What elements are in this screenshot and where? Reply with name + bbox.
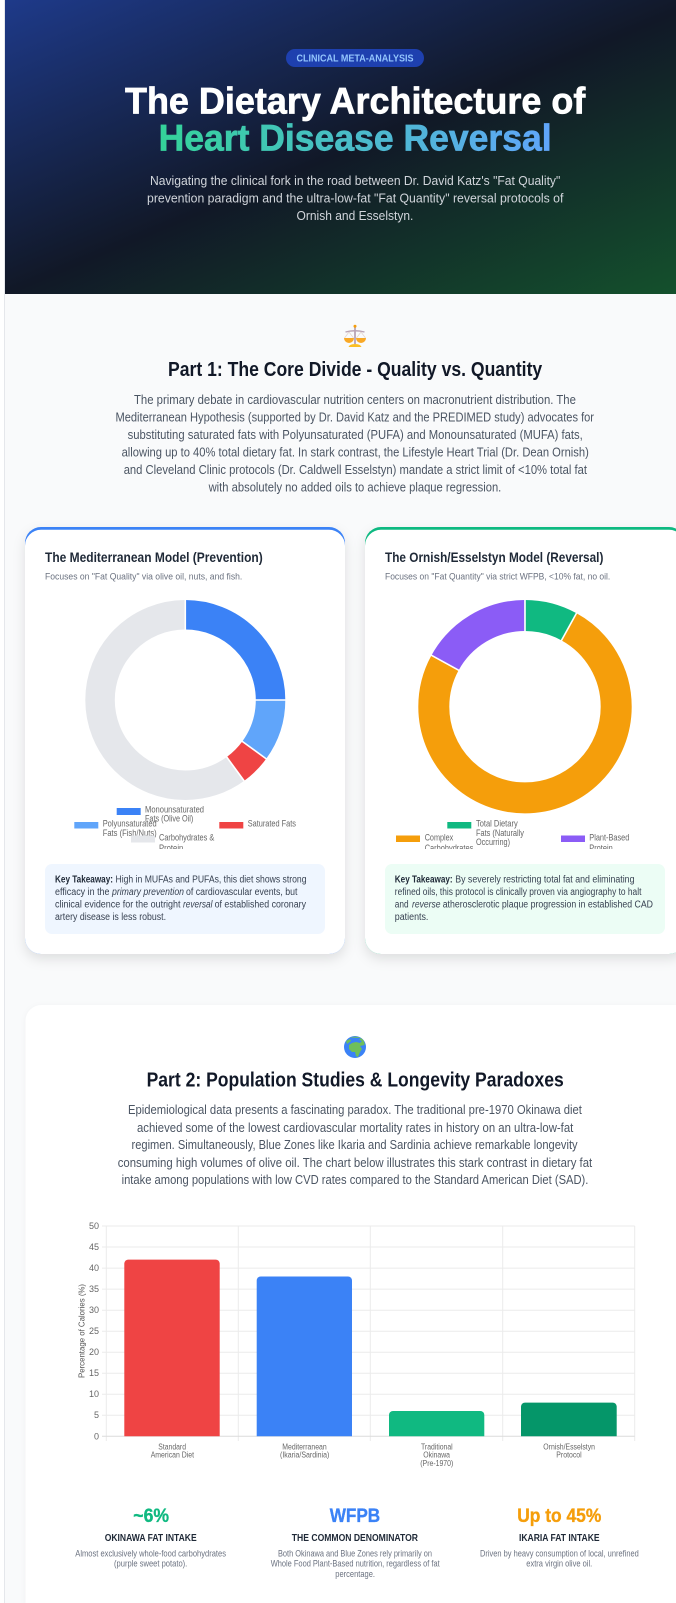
title: The Dietary Architecture of — [125, 79, 586, 121]
y-axis labels: 15 — [89, 1368, 99, 1378]
text block: part 1 introduction: and Cleveland Clinic protocols (Dr. Caldwell Esselstyn) mandate a strict limit of <10% total fat — [124, 463, 587, 477]
stat: ikaria fat intake: extra virgin olive oil. — [526, 1559, 592, 1569]
text block: part 2 introduction: consuming high volumes of olive oil. The chart below illustrates this stark contrast in dietary fat — [118, 1156, 593, 1170]
legend: ornish/esselstyn: Occurring) — [476, 837, 510, 848]
panel: ornish/esselstyn model — [365, 527, 676, 954]
text block: part 1 introduction: with absolutely no added oils to achieve plaque regression. — [208, 480, 501, 494]
text block: part 2 introduction: achieved some of the lowest cardiovascular mortality rates in history on an ultra-low-fat — [137, 1121, 574, 1135]
callout: mediterranean key takeaway: clinical evidence for the outright — [55, 900, 181, 911]
y-axis labels: 35 — [89, 1284, 99, 1294]
stat: ikaria fat intake: Up to 45% — [517, 1505, 601, 1527]
x-axis labels: Ornish/Esselstyn — [543, 1442, 595, 1451]
y-axis labels: 20 — [89, 1347, 99, 1357]
header banner — [5, 0, 676, 294]
stat: common denominator: Both Okinawa and Blue Zones rely primarily on — [278, 1549, 432, 1559]
legend: ornish/esselstyn: Plant-Based — [589, 833, 629, 844]
stat: ikaria fat intake: IKARIA FAT INTAKE — [519, 1533, 600, 1544]
subtitle: Ornish and Esselstyn. — [296, 208, 413, 223]
callout: ornish/esselstyn key takeaway: and — [395, 900, 409, 911]
title: Heart Disease Reversal — [159, 117, 552, 159]
title — [125, 79, 586, 159]
text block: part 1 introduction: The primary debate in cardiovascular nutrition centers on macronutrient distribution. The — [134, 393, 576, 407]
y-axis labels: 30 — [89, 1305, 99, 1315]
x-axis labels: Protocol — [556, 1450, 582, 1459]
legend: mediterranean: Carbohydrates & — [159, 833, 215, 844]
callout: ornish/esselstyn key takeaway: Key Takeaway: — [395, 875, 453, 886]
bar chart: dietary fat intake — [76, 1221, 635, 1468]
subtitle — [147, 173, 564, 223]
legend: ornish/esselstyn — [396, 820, 629, 849]
x-axis labels: Mediterranean — [282, 1442, 327, 1451]
text block: part 1 introduction: Mediterranean Hypothesis (supported by Dr. David Katz and the PREDIMED study) advocates for — [116, 410, 594, 424]
legend: mediterranean: Fats (Fish/Nuts) — [103, 828, 157, 839]
legend: ornish/esselstyn: Complex — [425, 833, 453, 844]
icon: globe — [344, 1036, 366, 1058]
legend: mediterranean: Protein — [159, 843, 183, 854]
bar: standard american diet — [124, 1260, 220, 1436]
legend: ornish/esselstyn: Protein — [589, 843, 613, 854]
stat: ikaria fat intake — [480, 1505, 639, 1569]
x-axis labels: American Diet — [151, 1450, 195, 1459]
badge: clinical meta-analysis: CLINICAL META-ANALYSIS — [296, 53, 414, 64]
donut chart: ornish/esselstyn macronutrients — [431, 599, 616, 798]
callout: mediterranean key takeaway: Key Takeaway: — [55, 875, 113, 886]
card subheading: ornish/esselstyn: Focuses on "Fat Quantity" via strict WFPB, <10% fat, no oil. — [385, 572, 610, 583]
callout: mediterranean key takeaway: primary prevention — [111, 887, 184, 898]
x-axis labels: Standard — [158, 1442, 186, 1451]
panel: mediterranean model — [25, 527, 345, 954]
legend: ornish/esselstyn: Fats (Naturally — [476, 828, 524, 839]
bar: ornish/esselstyn — [521, 1403, 617, 1436]
callout: mediterranean key takeaway: of cardiovascular events, but — [186, 887, 298, 898]
bar: mediterranean — [257, 1276, 352, 1436]
y-axis labels: 50 — [89, 1221, 99, 1231]
y-axis labels: 45 — [89, 1242, 99, 1252]
stat: okinawa fat intake: Almost exclusively whole-food carbohydrates — [75, 1549, 227, 1559]
y-axis title: Percentage of Calories (%) — [76, 1284, 86, 1378]
card subheading: mediterranean: Focuses on "Fat Quality" via olive oil, nuts, and fish. — [45, 572, 242, 583]
y-axis labels: 10 — [89, 1389, 99, 1399]
callout: mediterranean key takeaway — [45, 864, 325, 934]
y-axis labels: 40 — [89, 1263, 99, 1273]
card heading: mediterranean: The Mediterranean Model (Prevention) — [45, 550, 263, 565]
bar: traditional okinawa — [389, 1411, 484, 1436]
text block: part 2 introduction — [118, 1103, 593, 1187]
callout: ornish/esselstyn key takeaway: reverse — [412, 900, 441, 911]
stat: okinawa fat intake: (purple sweet potato). — [114, 1559, 187, 1569]
legend: ornish/esselstyn: Carbohydrates — [425, 843, 473, 854]
callout: ornish/esselstyn key takeaway: By severely restricting total fat and eliminating — [455, 875, 634, 886]
stat: common denominator: WFPB — [330, 1505, 380, 1527]
stat: common denominator: THE COMMON DENOMINATOR — [292, 1533, 418, 1544]
stat: common denominator: Whole Food Plant-Based nutrition, regardless of fat — [271, 1559, 440, 1569]
panel: population studies — [26, 1005, 676, 1603]
heading: part 2: Part 2: Population Studies & Longevity Paradoxes — [147, 1070, 564, 1092]
y-axis labels: 25 — [89, 1326, 99, 1336]
callout: ornish/esselstyn key takeaway — [385, 864, 665, 934]
subtitle: prevention paradigm and the ultra-low-fat "Fat Quantity" reversal protocols of — [147, 190, 564, 205]
x-axis labels: Traditional — [421, 1442, 453, 1451]
legend: mediterranean — [74, 806, 296, 849]
stat: ikaria fat intake: Driven by heavy consumption of local, unrefined — [480, 1549, 639, 1559]
legend: ornish/esselstyn: Total Dietary — [476, 819, 518, 830]
text block: part 2 introduction: regimen. Simultaneously, Blue Zones like Ikaria and Sardinia achieve remarkable longevity — [132, 1138, 578, 1152]
legend: mediterranean: Fats (Olive Oil) — [145, 814, 193, 825]
heading: part 1: Part 1: The Core Divide - Quality vs. Quantity — [168, 359, 543, 381]
text block: part 2 introduction: intake among populations with low CVD rates compared to the Standard American Diet (SAD). — [122, 1173, 588, 1187]
callout: ornish/esselstyn key takeaway: patients. — [395, 912, 428, 923]
subtitle: Navigating the clinical fork in the road between Dr. David Katz's "Fat Quality" — [150, 173, 560, 188]
callout: mediterranean key takeaway: reversal — [183, 900, 213, 911]
callout: mediterranean key takeaway: artery disease is less robust. — [55, 912, 166, 923]
x-axis labels: (Pre-1970) — [420, 1459, 454, 1468]
callout: mediterranean key takeaway: of established coronary — [215, 900, 306, 911]
x-axis labels — [151, 1442, 595, 1468]
donut chart: mediterranean macronutrients — [100, 599, 286, 785]
stat: okinawa fat intake: OKINAWA FAT INTAKE — [105, 1533, 197, 1544]
legend: mediterranean: Polyunsaturated — [103, 819, 157, 830]
stat: okinawa fat intake — [75, 1505, 227, 1569]
text block: part 1 introduction: allowing up to 40% total dietary fat. In stark contrast, the Lifestyle Heart Trial (Dr. Dean Ornish) — [122, 445, 589, 459]
y-axis labels: 5 — [94, 1410, 99, 1420]
icon: balance scales — [344, 325, 366, 347]
y-axis labels: 0 — [94, 1431, 99, 1441]
card heading: ornish/esselstyn: The Ornish/Esselstyn Model (Reversal) — [385, 550, 603, 565]
text block: part 2 introduction: Epidemiological data presents a fascinating paradox. The traditional pre-1970 Okinawa diet — [128, 1103, 582, 1117]
text block: part 1 introduction: substituting saturated fats with Polyunsaturated (PUFA) and Monounsaturated (MUFA) fats, — [128, 428, 583, 442]
y-axis labels — [89, 1221, 99, 1441]
badge: clinical meta-analysis — [286, 49, 424, 67]
x-axis labels: Okinawa — [423, 1450, 450, 1459]
stat: common denominator: percentage. — [335, 1569, 375, 1579]
stat: okinawa fat intake: ~6% — [133, 1505, 169, 1527]
callout: mediterranean key takeaway: High in MUFAs and PUFAs, this diet shows strong — [116, 875, 306, 886]
text block: part 1 introduction — [116, 393, 594, 494]
legend: mediterranean: Saturated Fats — [248, 819, 296, 830]
x-axis labels: (Ikaria/Sardinia) — [280, 1450, 330, 1459]
legend: mediterranean: Monounsaturated — [145, 805, 204, 816]
callout: mediterranean key takeaway: efficacy in the — [55, 887, 110, 898]
stat: common denominator — [271, 1505, 440, 1579]
